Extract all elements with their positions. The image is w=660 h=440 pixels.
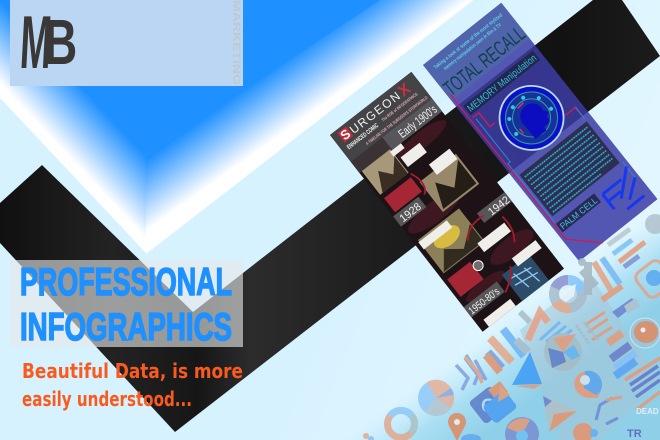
intro text: memory manipulation seen in film & TV — [443, 22, 503, 72]
blue top area with chevron — [0, 0, 660, 254]
icon: striped bars — [585, 312, 612, 340]
icon: stack with bars — [625, 358, 660, 410]
red connector arcs — [409, 145, 541, 295]
icon: segmented circle — [505, 417, 539, 440]
label: Palm Cell: PALM CELL — [558, 195, 599, 231]
header — [330, 72, 442, 175]
tagline: Beautiful Data, is more — [22, 359, 243, 383]
icon: gear in rounded square — [633, 258, 660, 300]
icon: label "DEAD": DEAD — [636, 407, 659, 416]
icon: orange circle — [573, 423, 598, 440]
icon: G badge — [468, 381, 508, 425]
icon: people — [578, 258, 620, 295]
date strips: 1942 — [486, 194, 512, 218]
icon: blue dots — [461, 434, 481, 440]
body text block — [519, 121, 620, 216]
infographic poster: Total Recall — [423, 3, 658, 261]
icon: pie chart — [418, 380, 454, 416]
caption boxes — [364, 114, 560, 329]
infographic poster: SurgeonX timeline — [330, 72, 564, 332]
heading: PROFESSIONAL — [20, 261, 232, 304]
icon: blue triangle — [512, 352, 542, 389]
subtitle strip: MEMORY Manipulation — [466, 53, 539, 114]
icon group — [363, 214, 660, 440]
logo: MB monogram: M — [18, 0, 54, 84]
S badge — [337, 126, 353, 143]
era: Early 1900's: Early 1900's — [396, 102, 440, 141]
icon: arrows set — [608, 229, 645, 267]
X badge: X — [395, 80, 414, 100]
vertical word MARKETING: MARKETING — [230, 0, 242, 85]
icon: folded ribbon — [602, 286, 640, 318]
subtitle: ENHANCED COMIC — [346, 122, 380, 151]
logo: MB monogram — [18, 0, 77, 84]
rise caption: A TIMELINE FOR THE SURGEON'S STORYWORLD — [365, 95, 429, 146]
icon: blue tile — [482, 385, 518, 424]
product name: URGEON — [347, 89, 403, 137]
date strips — [393, 153, 554, 318]
icon: purple glyph: TR — [627, 428, 642, 440]
icon: large triangle — [543, 396, 577, 432]
logo panel — [10, 0, 243, 86]
header: S — [337, 126, 354, 143]
icon: padlock — [574, 371, 602, 398]
icons sheet — [342, 208, 660, 440]
icon: stacked bars — [608, 333, 636, 376]
icon: donut chart — [388, 410, 415, 438]
circuit lines — [450, 38, 652, 260]
tagline: easily understood... — [22, 387, 192, 411]
rise caption: The RISE of INFOGRAPHICS: — [381, 91, 419, 123]
date strips: 1928 — [398, 201, 424, 225]
icon: bars — [486, 329, 528, 372]
comic panels — [362, 119, 552, 330]
icon: bird donut — [554, 280, 582, 308]
icon: map pin — [448, 413, 466, 440]
icon: orange circle badge — [630, 318, 660, 348]
icon: emblem — [471, 259, 485, 273]
intro text — [433, 13, 508, 76]
title panel — [10, 260, 243, 347]
icon: rising arrow and bars — [520, 312, 572, 344]
icon: squiggly arrows — [456, 355, 486, 390]
heading: INFOGRAPHICS — [20, 306, 232, 349]
rise caption — [359, 88, 429, 146]
heading — [20, 261, 232, 349]
icon: head in circular dial — [487, 73, 577, 163]
icon: multicolour gear — [544, 333, 582, 371]
logo: MB monogram: B — [44, 7, 77, 78]
icon: arrows — [596, 398, 618, 424]
tagline — [22, 359, 243, 411]
icon: G badge: G — [481, 396, 496, 417]
icon: circular chart — [645, 214, 660, 234]
red text boxes — [384, 177, 488, 297]
wine-red body texture — [364, 114, 546, 309]
icon: small nodes — [363, 433, 374, 440]
date strips: 1950-80's — [466, 286, 502, 317]
icon: palm glyph — [598, 166, 648, 215]
intro text: Taking a look at some of the most stylized — [433, 13, 504, 71]
